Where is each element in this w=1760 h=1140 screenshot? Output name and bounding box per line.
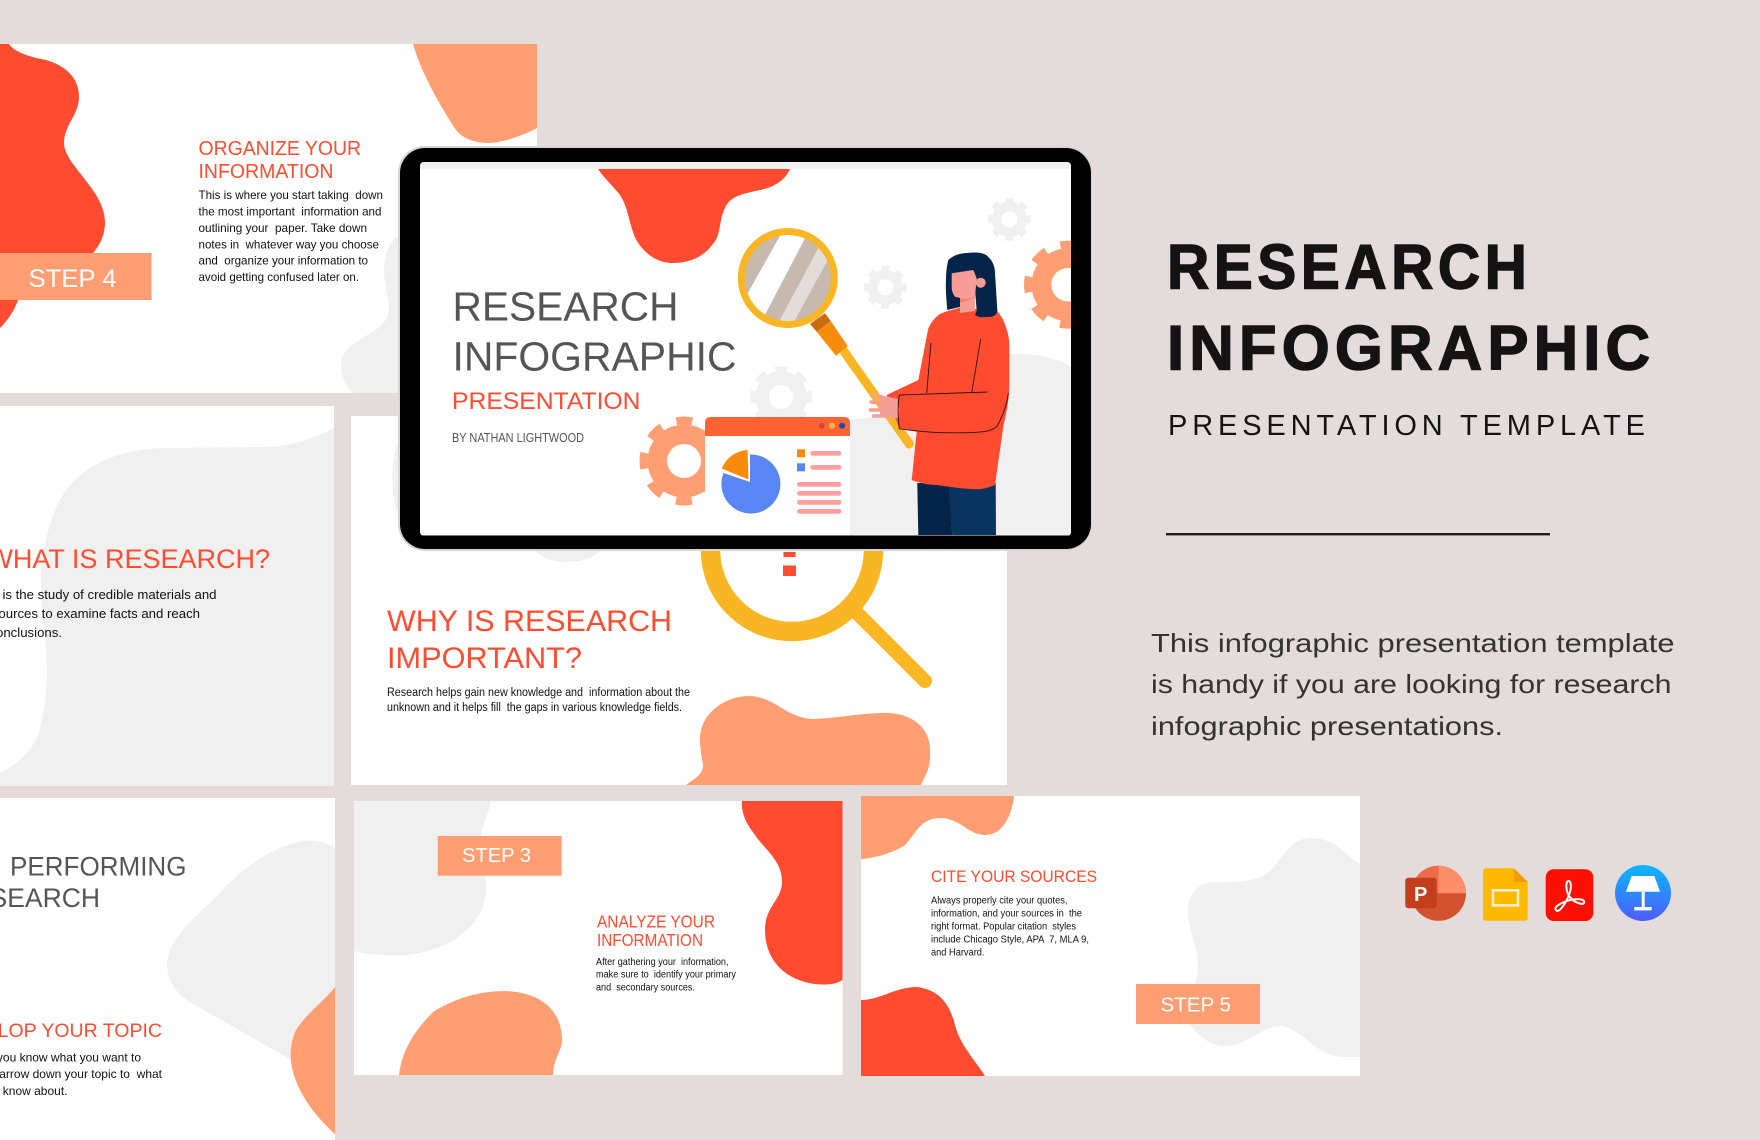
tablet author: BY NATHAN LIGHTWOOD [452,431,584,445]
organize body text: outlining your paper. Take down [198,221,367,235]
why body text: unknown and it helps fill the gaps in various knowledge fields. [387,702,682,714]
main title [1167,232,1650,384]
cite body [931,895,1089,959]
step 5 badge [1136,984,1260,1024]
step 4 badge: STEP 4 [28,265,117,293]
step 3 badge: STEP 3 [462,845,531,867]
icon: PowerPoint: P [1414,884,1427,906]
chart legend [797,449,841,514]
organize heading: INFORMATION [198,161,334,183]
organize body text: This is where you start taking down [198,188,383,202]
organize body text: notes in whatever way you choose [198,238,379,252]
what is research body [0,590,216,637]
analyze body [596,957,736,993]
description text: infographic presentations. [1151,711,1503,741]
cite body: right format. Popular citation styles [931,922,1076,933]
cite body: include Chicago Style, APA 7, MLA 9, [931,935,1089,946]
panel: step 5 slide [861,796,1360,1076]
chart window [705,417,850,514]
analyze heading [597,912,715,950]
performing research heading: PERFORMING [10,852,186,882]
icon: orange gear lower [640,416,705,506]
why heading: IMPORTANT? [387,642,582,675]
divider line [1166,533,1550,535]
person illustration [870,252,1009,536]
panel: performing research slide [0,798,335,1140]
develop topic body [0,1053,162,1095]
organize body text: and organize your information to [198,254,368,268]
description text [1151,628,1674,741]
why heading [387,610,670,668]
panel: why is research important slide [351,416,1007,785]
icon: gray gear top right [990,200,1028,238]
step 5 badge: STEP 5 [1160,995,1231,1017]
icon: Google Slides [1483,868,1528,921]
subtitle: PRESENTATION TEMPLATE [1168,410,1645,442]
analyze body: After gathering your information, [596,957,728,968]
tablet title [456,292,735,371]
organize body text: avoid getting confused later on. [198,270,359,284]
icon: gray gear middle [866,268,904,306]
organize heading: ORGANIZE YOUR [198,138,361,160]
icon: orange gear right [1024,240,1071,329]
organize body text: the most important information and [198,204,382,218]
description text: is handy if you are looking for research [1151,669,1672,699]
panel: what is research slide [0,406,334,786]
step 4 badge [0,253,152,300]
tablet screen [420,162,1108,536]
icon: Keynote [1615,865,1671,921]
icon: PowerPoint [1405,866,1466,921]
analyze body: and secondary sources. [596,982,695,993]
main title: INFOGRAPHIC [1167,314,1650,384]
cite body: and Harvard. [931,948,984,959]
icon: Adobe PDF [1546,869,1593,921]
panel: step 3 slide [354,801,842,1075]
main title: RESEARCH [1167,232,1527,302]
description text: This infographic presentation template [1151,628,1674,658]
pie chart [721,450,780,513]
cite body: information, and your sources in the [931,908,1082,919]
step 3 badge [438,836,562,876]
tablet title: RESEARCH [452,284,678,330]
cite heading: CITE YOUR SOURCES [931,867,1097,886]
performing research heading [0,856,185,908]
icon: tablet magnifier [741,230,909,444]
analyze body: make sure to identify your primary [596,970,736,981]
organize body text [198,188,383,284]
cite body: Always properly cite your quotes, [931,895,1068,906]
organize heading [199,141,360,178]
tablet subtitle: PRESENTATION [452,388,640,415]
analyze heading: ANALYZE YOUR [597,912,715,932]
panel: step 4 slide [0,44,537,393]
panel: tablet mockup [398,146,1108,551]
icon: exclamation mark [783,552,796,576]
icon: large magnifier [700,551,932,688]
why heading: WHY IS RESEARCH [387,605,672,638]
why body text: Research helps gain new knowledge and information about the [387,687,690,699]
analyze heading: INFORMATION [597,930,703,950]
icon: gray gear lower [753,369,809,425]
why body text [387,687,690,714]
tablet title: INFOGRAPHIC [452,334,736,380]
